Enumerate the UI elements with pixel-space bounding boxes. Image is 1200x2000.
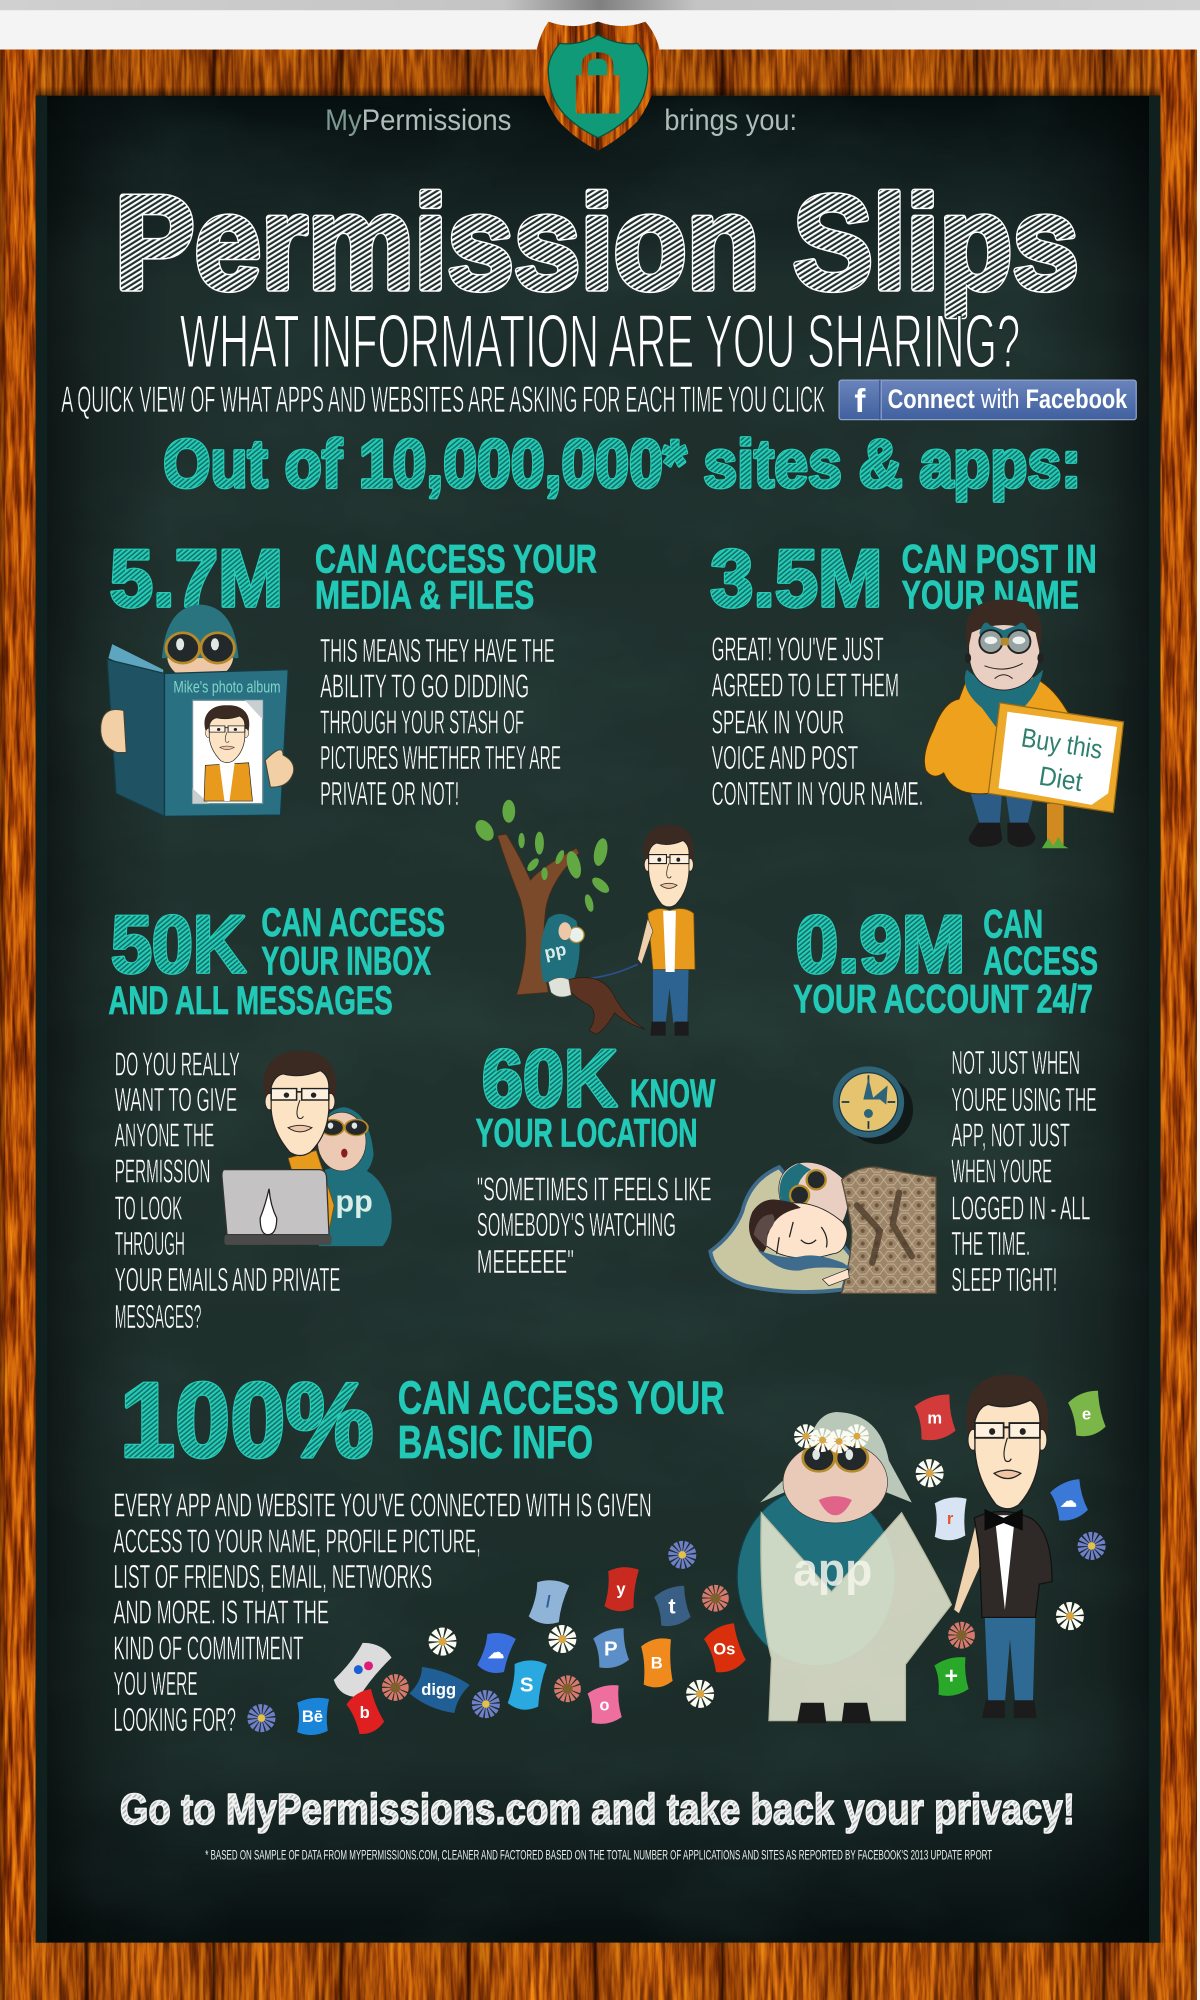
icons: flowers and social media badges: e [1082, 1405, 1091, 1424]
heading [398, 1371, 724, 1468]
illustration: fat app guy with sign: Buy this [1019, 722, 1105, 765]
body text: APP, NOT JUST [951, 1118, 1070, 1155]
illustration: fat app guy with sign: Diet [1037, 761, 1085, 797]
body text [115, 1046, 340, 1336]
body text: TO LOOK [115, 1190, 182, 1227]
body text: EVERY APP AND WEBSITE YOU'VE CONNECTED WITH IS GIVEN [113, 1488, 652, 1525]
stat number 50K: 50K [111, 900, 246, 990]
icons: flowers and social media badges: P [604, 1639, 618, 1661]
icons: flowers and social media badges: / [546, 1592, 551, 1611]
body text [477, 1171, 712, 1281]
body text [712, 632, 923, 813]
stat number 60K: 60K [482, 1034, 617, 1124]
body text [113, 1488, 652, 1739]
title: Permission Slips [115, 169, 1079, 317]
heading: YOUR LOCATION [476, 1112, 698, 1156]
body text [951, 1045, 1097, 1299]
stat number 60K: 60K [482, 1034, 617, 1124]
stat number 3.5M: 3.5M [710, 534, 882, 624]
illustration: app guy with photo album [101, 605, 294, 816]
body text: GREAT! YOU'VE JUST [712, 632, 884, 669]
heading [793, 902, 1098, 1022]
icons: flowers and social media badges: digg [421, 1680, 456, 1699]
stat number 3.5M: 3.5M [710, 534, 882, 624]
body text: YOU WERE [113, 1666, 198, 1703]
illustration: man and app guy at laptop [222, 1051, 392, 1246]
icons: flowers and social media badges: Bē [302, 1707, 323, 1726]
icons: flowers and social media badges: o [599, 1695, 610, 1714]
illustration: sleeping man and app guy [710, 1162, 936, 1293]
icons: flowers and social media badges [252, 1389, 1108, 1737]
heading: CAN ACCESS YOUR [315, 538, 597, 582]
panel: 60K location [476, 1034, 716, 1281]
icons: flowers and social media badges: + [945, 1663, 958, 1689]
illustration: fat app guy with sign [924, 599, 1123, 848]
body text: VOICE AND POST [712, 740, 858, 777]
body text: ACCESS TO YOUR NAME, PROFILE PICTURE, [113, 1523, 481, 1560]
body text: LIST OF FRIENDS, EMAIL, NETWORKS [113, 1559, 432, 1596]
heading: MEDIA & FILES [315, 573, 534, 617]
icons: flowers and social media badges: ☁ [488, 1643, 505, 1662]
body text: SLEEP TIGHT! [951, 1262, 1057, 1299]
heading: YOUR ACCOUNT 24/7 [793, 978, 1093, 1022]
body text [320, 633, 561, 813]
connect with facebook button [839, 380, 1136, 420]
body text: PRIVATE OR NOT! [320, 776, 459, 813]
connect with facebook button: Connect with Facebook [888, 384, 1127, 414]
icons: flowers and social media badges: y [616, 1579, 626, 1598]
body text: LOOKING FOR? [113, 1702, 236, 1739]
stat number 5.7M: 5.7M [110, 534, 283, 624]
heading [108, 901, 445, 1023]
panel: 3.5M post in your name [710, 534, 1123, 848]
body text: YOUR EMAILS AND PRIVATE [115, 1262, 340, 1299]
heading: BASIC INFO [398, 1416, 593, 1468]
body text: THE TIME. [951, 1226, 1030, 1263]
stat number 100%: 100% [120, 1362, 374, 1480]
body text: MEEEEEE" [477, 1244, 574, 1281]
headline: out of 10,000,000: Out of 10,000,000* sites & apps: [163, 427, 1081, 502]
stat number 5.7M: 5.7M [110, 534, 283, 624]
body text: "SOMETIMES IT FEELS LIKE [477, 1171, 712, 1208]
body text: CONTENT IN YOUR NAME. [712, 776, 923, 813]
shield wood [536, 22, 660, 150]
title: Permission Slips [115, 169, 1079, 317]
illustration: man with dog and app guy behind tree [472, 800, 695, 1036]
heading: CAN ACCESS YOUR [398, 1371, 724, 1423]
illustration: man with dog and app guy behind tree: pp [542, 939, 568, 963]
heading: YOUR INBOX [261, 939, 431, 983]
padlock [576, 52, 620, 114]
panel: 100% basic info [113, 1362, 1108, 1739]
body text: AND MORE. IS THAT THE [113, 1595, 329, 1632]
icons: flowers and social media badges: B [651, 1653, 663, 1672]
body text: PERMISSION [115, 1153, 210, 1190]
illustration: app guy as bride [737, 1412, 951, 1723]
heading: KNOW [630, 1072, 716, 1116]
illustration: app guy with photo album: Mike's photo album [173, 678, 281, 697]
stat number 0.9M: 0.9M [796, 900, 965, 990]
body text: WANT TO GIVE [115, 1082, 237, 1119]
body text: THROUGH YOUR STASH OF [320, 704, 524, 741]
illustration: app guy as bride: app [793, 1543, 872, 1595]
panel: 50K inbox [108, 900, 445, 1336]
stat number 0.9M: 0.9M [796, 900, 965, 990]
heading: ACCESS [983, 939, 1098, 983]
body text: MESSAGES? [115, 1299, 201, 1336]
brand line: brings you: [664, 104, 797, 137]
panel: 0.9M account [710, 900, 1098, 1299]
body text: THROUGH [115, 1226, 185, 1263]
icons: flowers and social media badges: Os [713, 1639, 735, 1658]
headline: out of 10,000,000: Out of 10,000,000* sites & apps: [163, 427, 1081, 502]
icons: flowers and social media badges: b [360, 1703, 370, 1722]
icons: flowers and social media badges: S [520, 1674, 533, 1696]
illustration: man and app guy at laptop: pp [335, 1185, 373, 1219]
heading: CAN POST IN [902, 538, 1097, 582]
body text: KIND OF COMMITMENT [113, 1630, 304, 1667]
heading: AND ALL MESSAGES [108, 979, 393, 1023]
brand line [325, 104, 797, 137]
heading: YOUR NAME [902, 573, 1079, 617]
panel: 5.7M media and files: PICTURES WHETHER THEY ARE [320, 740, 561, 777]
body text: DO YOU REALLY [115, 1046, 240, 1083]
body text: AGREED TO LET THEM [712, 667, 899, 704]
heading [902, 538, 1097, 617]
illustration: man as groom [954, 1375, 1052, 1718]
icons: flowers and social media badges: ☁ [1060, 1491, 1077, 1510]
icons: flowers and social media badges: r [947, 1509, 954, 1528]
connect with facebook button: f [854, 383, 866, 420]
body text: SOMEBODY'S WATCHING [477, 1207, 676, 1244]
shield green inset [548, 35, 648, 138]
brand line: MyPermissions [325, 104, 511, 137]
body text: ABILITY TO GO DIDDING [320, 669, 529, 706]
panel: 5.7M media and files [101, 534, 597, 816]
icons: flowers and social media badges: m [927, 1408, 942, 1427]
stat number 100%: 100% [120, 1362, 374, 1480]
icon: shield with padlock [536, 22, 660, 150]
body text: ANYONE THE [115, 1118, 214, 1155]
icon: clock [833, 1066, 913, 1144]
heading [476, 1072, 716, 1156]
heading: CAN [983, 902, 1043, 947]
body text: SPEAK IN YOUR [712, 704, 844, 741]
top page band [0, 0, 1200, 51]
stat number 50K: 50K [111, 900, 246, 990]
heading: CAN ACCESS [261, 901, 445, 945]
heading [315, 538, 597, 617]
body text: THIS MEANS THEY HAVE THE [320, 633, 555, 670]
icons: flowers and social media badges: t [668, 1594, 676, 1619]
body text: WHEN YOURE [951, 1153, 1052, 1190]
